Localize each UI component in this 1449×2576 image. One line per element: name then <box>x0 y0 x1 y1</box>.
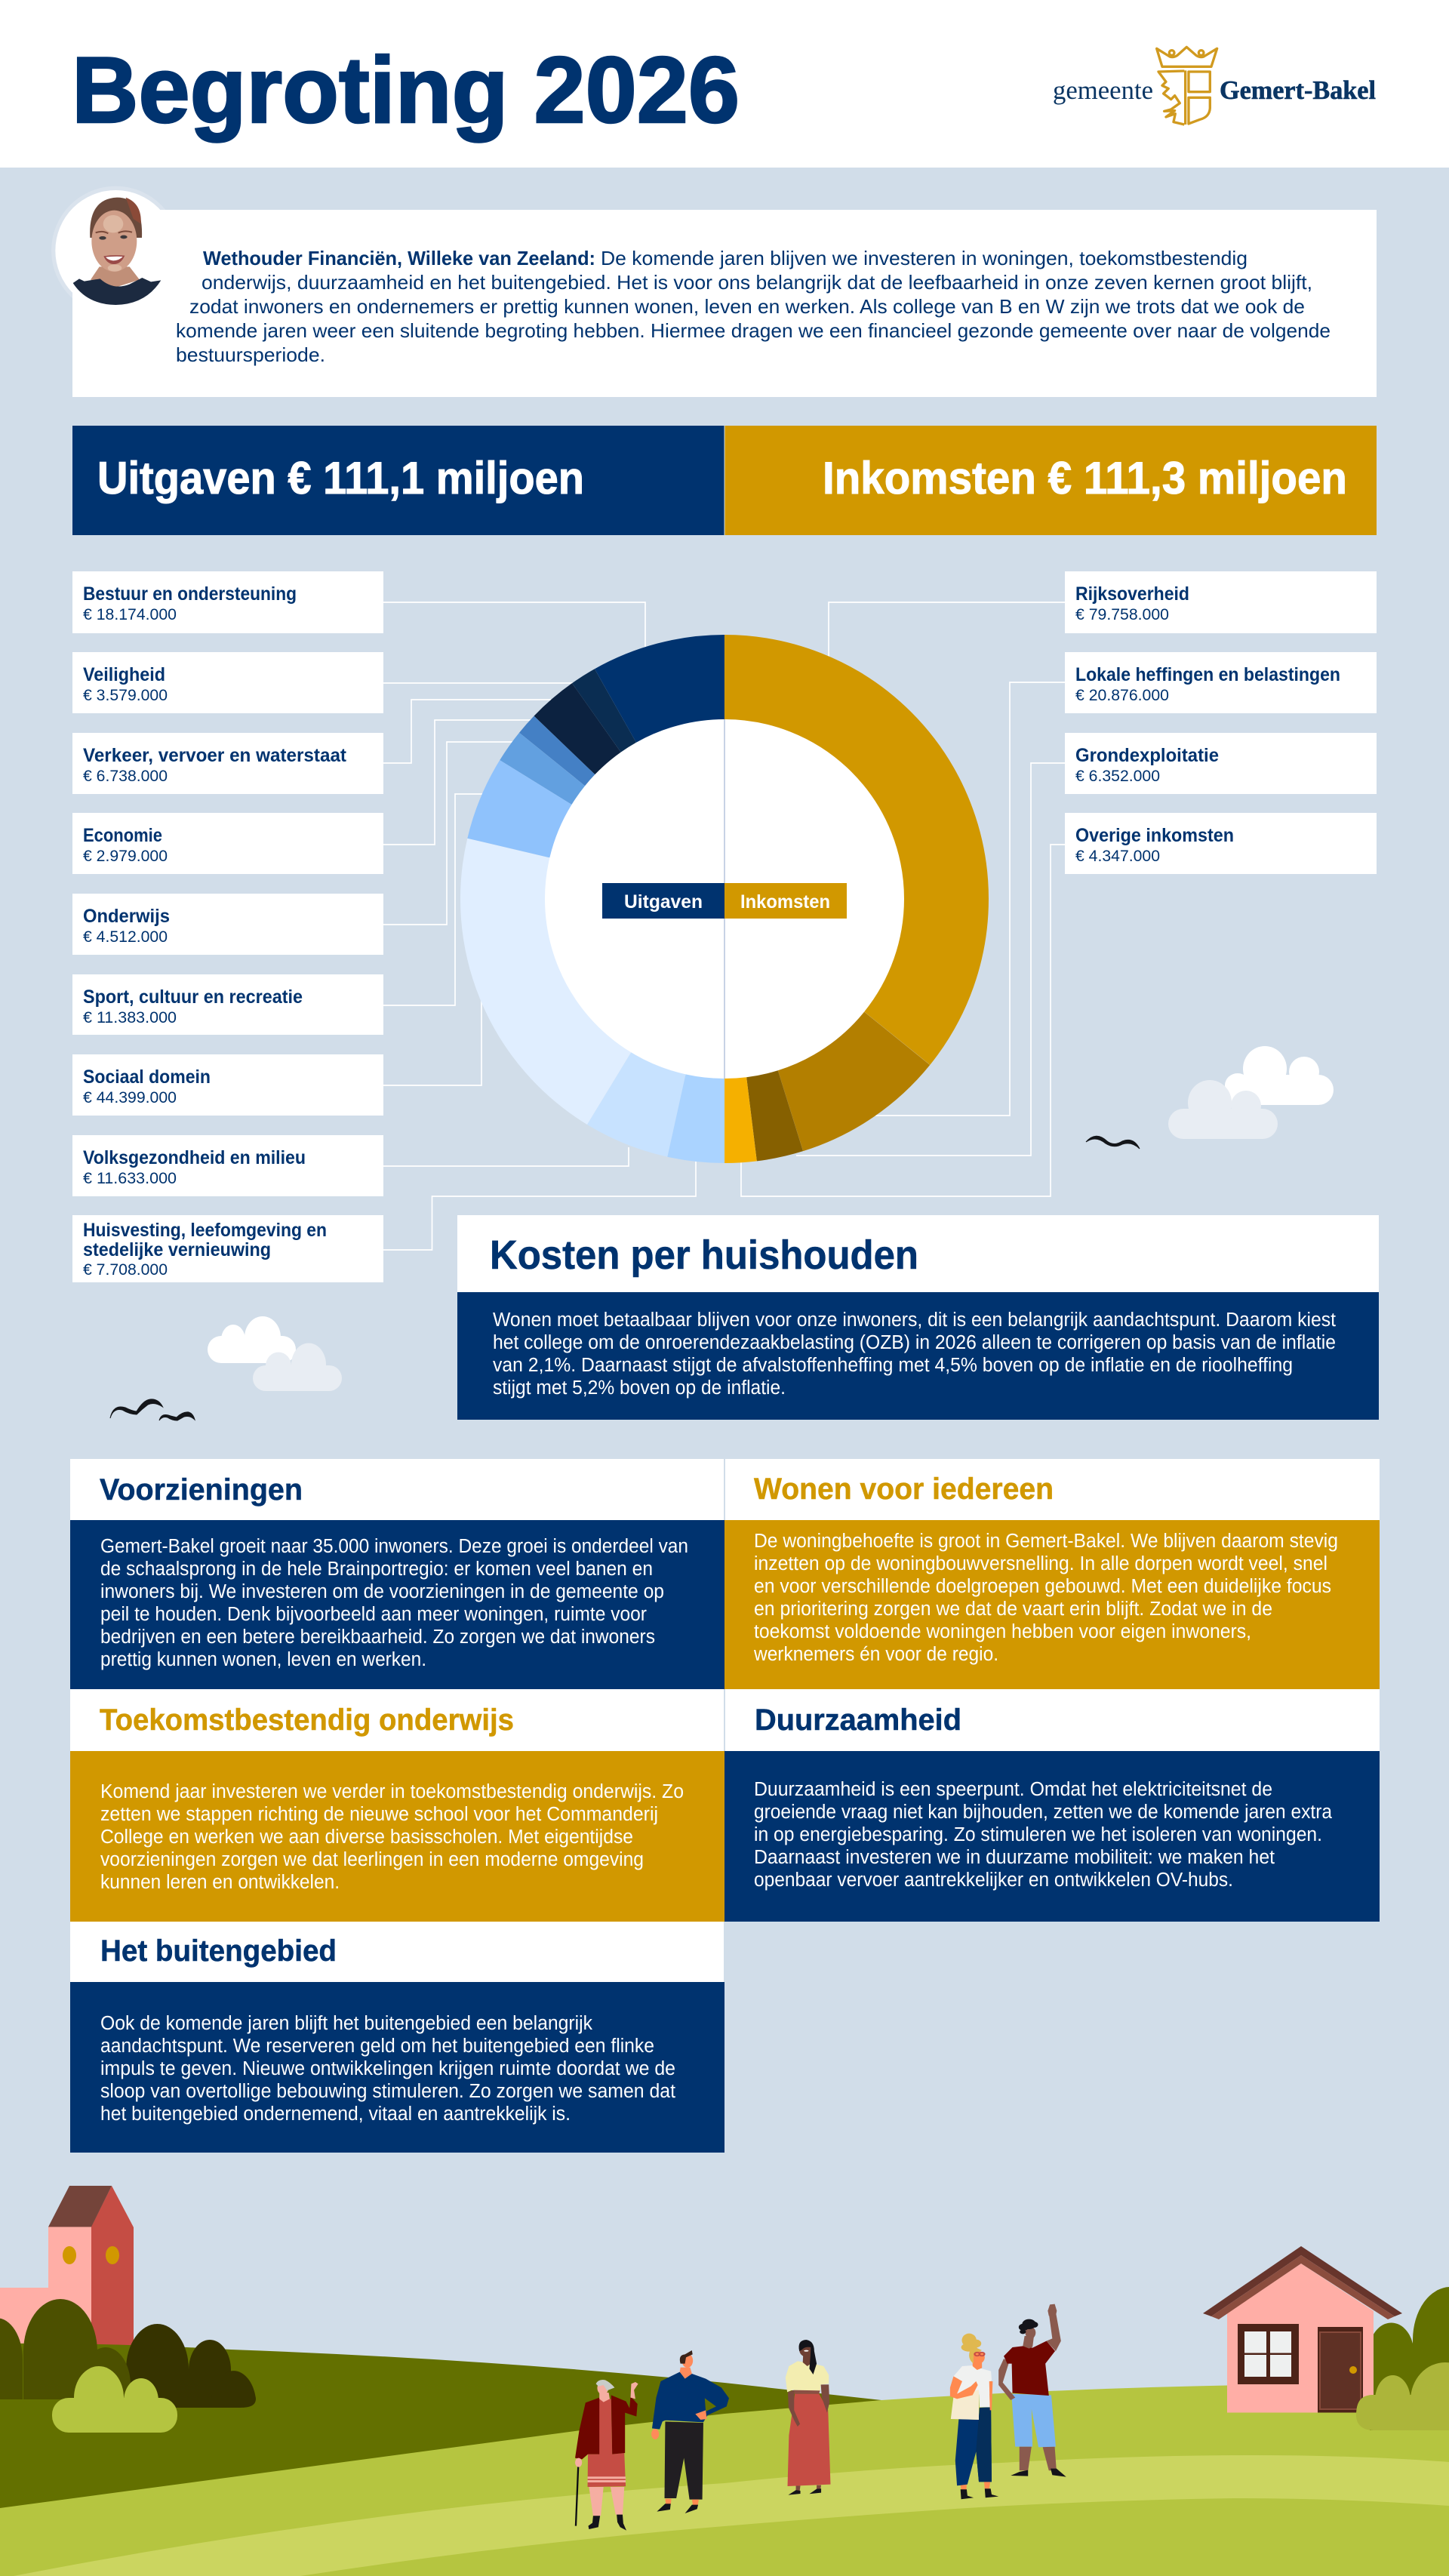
body text: sloop van overtollige bebouwing stimuleren. Zo zorgen we samen dat <box>100 2081 675 2102</box>
chart center label: Uitgaven <box>602 883 724 919</box>
label: Overige inkomsten: Overige inkomsten <box>1075 825 1234 846</box>
house <box>1203 2246 1402 2412</box>
bush right <box>1356 2362 1449 2430</box>
header <box>0 0 1449 168</box>
heading: Duurzaamheid <box>755 1703 961 1737</box>
label: Sport, cultuur en recreatie <box>72 974 383 1035</box>
panel: quote <box>72 210 1377 397</box>
label: Sport, cultuur en recreatie: Sport, cultuur en recreatie <box>83 986 303 1008</box>
body text: groeiende vraag niet kan bijhouden, zetten we de komende jaren extra <box>754 1802 1333 1823</box>
panel: Het buitengebied <box>70 1922 724 2153</box>
body text <box>754 1779 1333 1891</box>
label: Huisvesting, leefomgeving en stedelijke vernieuwing: € 7.708.000 <box>83 1261 168 1279</box>
bird right <box>1086 1136 1140 1149</box>
body text <box>753 1531 1338 1665</box>
label: Sociaal domein <box>72 1054 383 1116</box>
label: Sociaal domein: € 44.399.000 <box>83 1089 177 1106</box>
body text: kunnen leren en ontwikkelen. <box>100 1872 340 1893</box>
body text: peil te houden. Denk bijvoorbeeld aan meer woningen, ruimte voor <box>100 1604 647 1625</box>
person: woman in red skirt <box>786 2340 830 2495</box>
body text: De woningbehoefte is groot in Gemert-Bakel. We blijven daarom stevig <box>754 1531 1338 1552</box>
body text <box>100 2013 675 2125</box>
label: Overige inkomsten <box>1065 813 1377 874</box>
body text <box>100 1781 684 1893</box>
label: Onderwijs: € 4.512.000 <box>83 928 168 946</box>
body text: en prioritering zorgen we dat de vaart erin blijft. Zodat we in de <box>754 1599 1272 1620</box>
label: Economie: Economie <box>83 825 162 846</box>
label: Economie: € 2.979.000 <box>83 848 168 865</box>
label: Veiligheid <box>72 652 383 713</box>
body text: het college om de onroerendezaakbelasting (OZB) in 2026 alleen te corrigeren op basis van de inflatie <box>493 1332 1336 1353</box>
body text: impuls te geven. Nieuwe ontwikkelingen krijgen ruimte doordat we de <box>100 2058 675 2079</box>
body text: College en werken we aan diverse basisscholen. Met eigentijdse <box>100 1827 633 1848</box>
body text: Gemert-Bakel groeit naar 35.000 inwoners. Deze groei is onderdeel van <box>100 1536 688 1557</box>
footpath <box>14 2455 1449 2576</box>
quote text <box>176 247 1331 366</box>
label: Veiligheid: € 3.579.000 <box>83 687 168 704</box>
panel: Kosten per huishouden <box>457 1215 1379 1420</box>
heading: Het buitengebied <box>100 1934 337 1968</box>
logo: gemeente Gemert-Bakel: Gemert-Bakel <box>1220 75 1376 105</box>
person: older woman with cane <box>575 2380 638 2531</box>
label: Lokale heffingen en belastingen: Lokale heffingen en belastingen <box>1075 664 1340 685</box>
body text: zetten we stappen richting de nieuwe school voor het Commanderij <box>100 1804 658 1825</box>
body text: toekomst voldoende woningen hebben voor eigen inwoners, <box>754 1621 1251 1642</box>
label: Volksgezondheid en milieu <box>72 1135 383 1196</box>
body text: prettig kunnen wonen, leven en werken. <box>100 1649 426 1670</box>
panel: Uitgaven total <box>72 426 724 535</box>
label: Huisvesting, leefomgeving en stedelijke vernieuwing: Huisvesting, leefomgeving en <box>83 1220 327 1241</box>
label: Grondexploitatie <box>1065 733 1377 794</box>
label: Volksgezondheid en milieu: € 11.633.000 <box>83 1170 177 1187</box>
panel: Uitgaven total: Uitgaven € 111,1 miljoen <box>97 453 584 503</box>
label: Sociaal domein: Sociaal domein <box>83 1066 211 1088</box>
label: Rijksoverheid <box>1065 571 1377 633</box>
label: Huisvesting, leefomgeving en stedelijke vernieuwing <box>72 1215 383 1282</box>
logo: gemeente Gemert-Bakel: gemeente <box>1053 75 1153 105</box>
label: Verkeer, vervoer en waterstaat: € 6.738.000 <box>83 768 168 785</box>
person: man in blue sweater <box>651 2350 729 2513</box>
trees right <box>1370 2287 1449 2430</box>
quote text: onderwijs, duurzaamheid en het buitengebied. Het is voor ons belangrijk dat de leefbaarheid in onze zeven kernen groot blijft, <box>202 271 1312 294</box>
door <box>1318 2327 1363 2412</box>
heading: Kosten per huishouden <box>490 1233 918 1278</box>
clouds left <box>208 1316 342 1391</box>
label: Sport, cultuur en recreatie: € 11.383.000 <box>83 1009 177 1026</box>
quote text: komende jaren weer een sluitende begroting hebben. Hiermee dragen we een financieel gezonde gemeente over naar de volgende <box>176 319 1331 342</box>
bushes left <box>0 2299 256 2433</box>
title: Begroting 2026 <box>72 38 740 143</box>
chart center label: Inkomsten <box>724 883 847 919</box>
label: Lokale heffingen en belastingen <box>1065 652 1377 713</box>
quote text: De komende jaren blijven we investeren in woningen, toekomstbestendig <box>601 247 1247 269</box>
label: Grondexploitatie: Grondexploitatie <box>1075 745 1219 766</box>
quote text: Wethouder Financiën, Willeke van Zeeland: <box>203 247 595 269</box>
logo: gemeente Gemert-Bakel <box>1053 47 1376 125</box>
body text: openbaar vervoer aantrekkelijker en ontwikkelen OV-hubs. <box>754 1870 1233 1891</box>
body text: inzetten op de woningbouwversnelling. In alle dorpen wordt veel, snel <box>754 1553 1327 1574</box>
heading: Toekomstbestendig onderwijs <box>100 1703 514 1737</box>
quote text: bestuursperiode. <box>176 343 325 366</box>
body text: werknemers én voor de regio. <box>753 1644 998 1665</box>
donut chart: uitgaven en inkomsten <box>411 585 1038 1213</box>
birds left <box>110 1399 195 1420</box>
quote text: zodat inwoners en ondernemers er prettig kunnen wonen, leven en werken. Als college van B en W zijn we trots dat we ook de <box>189 295 1305 318</box>
heading: Wonen voor iedereen <box>754 1473 1054 1506</box>
label: Onderwijs <box>72 894 383 955</box>
dark hill <box>0 2344 881 2521</box>
label: Verkeer, vervoer en waterstaat: Verkeer, vervoer en waterstaat <box>83 745 347 766</box>
label: Bestuur en ondersteuning: € 18.174.000 <box>83 606 177 623</box>
panel: Wonen voor iedereen <box>724 1459 1380 1689</box>
label: Bestuur en ondersteuning <box>72 571 383 633</box>
body text: in op energiebesparing. Zo stimuleren we het isoleren van woningen. <box>754 1824 1322 1845</box>
label: Huisvesting, leefomgeving en stedelijke vernieuwing: stedelijke vernieuwing <box>83 1239 271 1260</box>
body text: bedrijven en een betere bereikbaarheid. Zo zorgen we dat inwoners <box>100 1627 655 1648</box>
people <box>575 2304 1066 2531</box>
portrait: wethouder <box>51 186 180 315</box>
label: Veiligheid: Veiligheid <box>83 664 165 685</box>
chart center label: Inkomsten: Inkomsten <box>740 891 830 913</box>
body text: Komend jaar investeren we verder in toekomstbestendig onderwijs. Zo <box>100 1781 684 1802</box>
body text <box>493 1310 1336 1399</box>
panel: Voorzieningen <box>70 1459 724 1689</box>
panel: Inkomsten total: Inkomsten € 111,3 miljoen <box>823 453 1347 503</box>
panel: Inkomsten total <box>724 426 1377 535</box>
label: Rijksoverheid: € 79.758.000 <box>1075 606 1169 623</box>
person: woman with tote bag <box>950 2334 998 2499</box>
body text: Wonen moet betaalbaar blijven voor onze inwoners, dit is een belangrijk aandachtspunt. Daarom kiest <box>493 1310 1336 1331</box>
body text: Daarnaast investeren we in duurzame mobiliteit: we maken het <box>754 1847 1275 1868</box>
body text: het buitengebied ondernemend, vitaal en aantrekkelijk is. <box>100 2104 571 2125</box>
panel: Duurzaamheid <box>724 1689 1380 1922</box>
label: Rijksoverheid: Rijksoverheid <box>1075 583 1189 605</box>
body text: aandachtspunt. We reserveren geld om het buitengebied een flinke <box>100 2036 654 2057</box>
body text: en voor verschillende doelgroepen gebouwd. Met een duidelijke focus <box>754 1576 1331 1597</box>
body text: inwoners bij. We investeren om de voorzieningen in de gemeente op <box>100 1581 664 1602</box>
panel: Toekomstbestendig onderwijs <box>70 1689 724 1922</box>
person: man waving <box>998 2304 1066 2477</box>
body text <box>100 1536 688 1670</box>
body text: Duurzaamheid is een speerpunt. Omdat het elektriciteitsnet de <box>754 1779 1272 1800</box>
label: Lokale heffingen en belastingen: € 20.876.000 <box>1075 687 1169 704</box>
green hill <box>0 2384 1449 2576</box>
body text: voorzieningen zorgen we dat leerlingen in een moderne omgeving <box>100 1849 644 1870</box>
connector lines <box>383 602 1065 1250</box>
window <box>1238 2324 1299 2384</box>
church <box>0 2186 134 2401</box>
heading: Voorzieningen <box>100 1473 303 1507</box>
label: Overige inkomsten: € 4.347.000 <box>1075 848 1160 865</box>
chart center label: Uitgaven: Uitgaven <box>624 891 703 913</box>
clouds right <box>1168 1046 1334 1139</box>
label: Economie <box>72 813 383 874</box>
body text: stijgt met 5,2% boven op de inflatie. <box>493 1377 786 1399</box>
landscape illustration <box>0 2186 1449 2576</box>
label: Volksgezondheid en milieu: Volksgezondheid en milieu <box>83 1147 306 1168</box>
body text: van 2,1%. Daarnaast stijgt de afvalstoffenheffing met 4,5% boven op de inflatie en de rioolheffing <box>493 1355 1293 1376</box>
label: Onderwijs: Onderwijs <box>83 906 170 927</box>
label: Bestuur en ondersteuning: Bestuur en ondersteuning <box>83 583 297 605</box>
body text: Ook de komende jaren blijft het buitengebied een belangrijk <box>100 2013 592 2034</box>
body text: de schaalsprong in de hele Brainportregio: er komen veel banen en <box>100 1559 653 1580</box>
label: Grondexploitatie: € 6.352.000 <box>1075 768 1160 785</box>
label: Verkeer, vervoer en waterstaat <box>72 733 383 794</box>
